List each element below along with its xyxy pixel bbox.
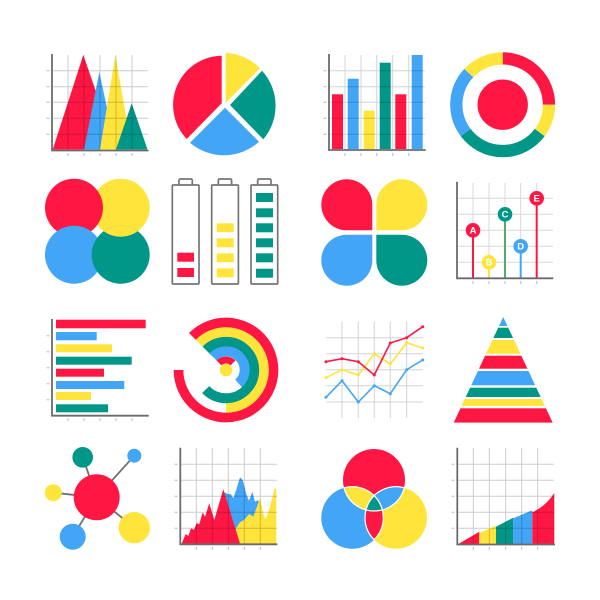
icon: donut chart — [456, 58, 549, 151]
icon: four petals — [321, 179, 427, 286]
icon: four overlapping circles — [45, 179, 150, 284]
icon: lollipop chart — [457, 182, 553, 284]
icon: lollipop chart: D — [517, 242, 524, 253]
icon: mountain area chart — [174, 448, 277, 550]
icon: lollipop chart: C — [502, 210, 509, 221]
icon: pyramid chart — [450, 317, 556, 423]
icon: column chart — [324, 54, 426, 156]
icon: stepped area chart — [452, 448, 555, 550]
icon: horizontal bar chart — [46, 319, 149, 421]
icon: lollipop chart: A — [470, 226, 477, 237]
icon: venn diagram — [321, 449, 427, 549]
icon: radial bar chart — [178, 322, 274, 417]
icon: molecule network — [45, 447, 150, 550]
icon: batteries — [172, 179, 278, 284]
icon: lollipop chart: E — [534, 194, 540, 205]
icon: pie chart — [173, 53, 276, 155]
icon: line chart — [324, 322, 424, 418]
icon: triangle area chart — [46, 54, 148, 156]
icon: lollipop chart: B — [486, 258, 493, 269]
